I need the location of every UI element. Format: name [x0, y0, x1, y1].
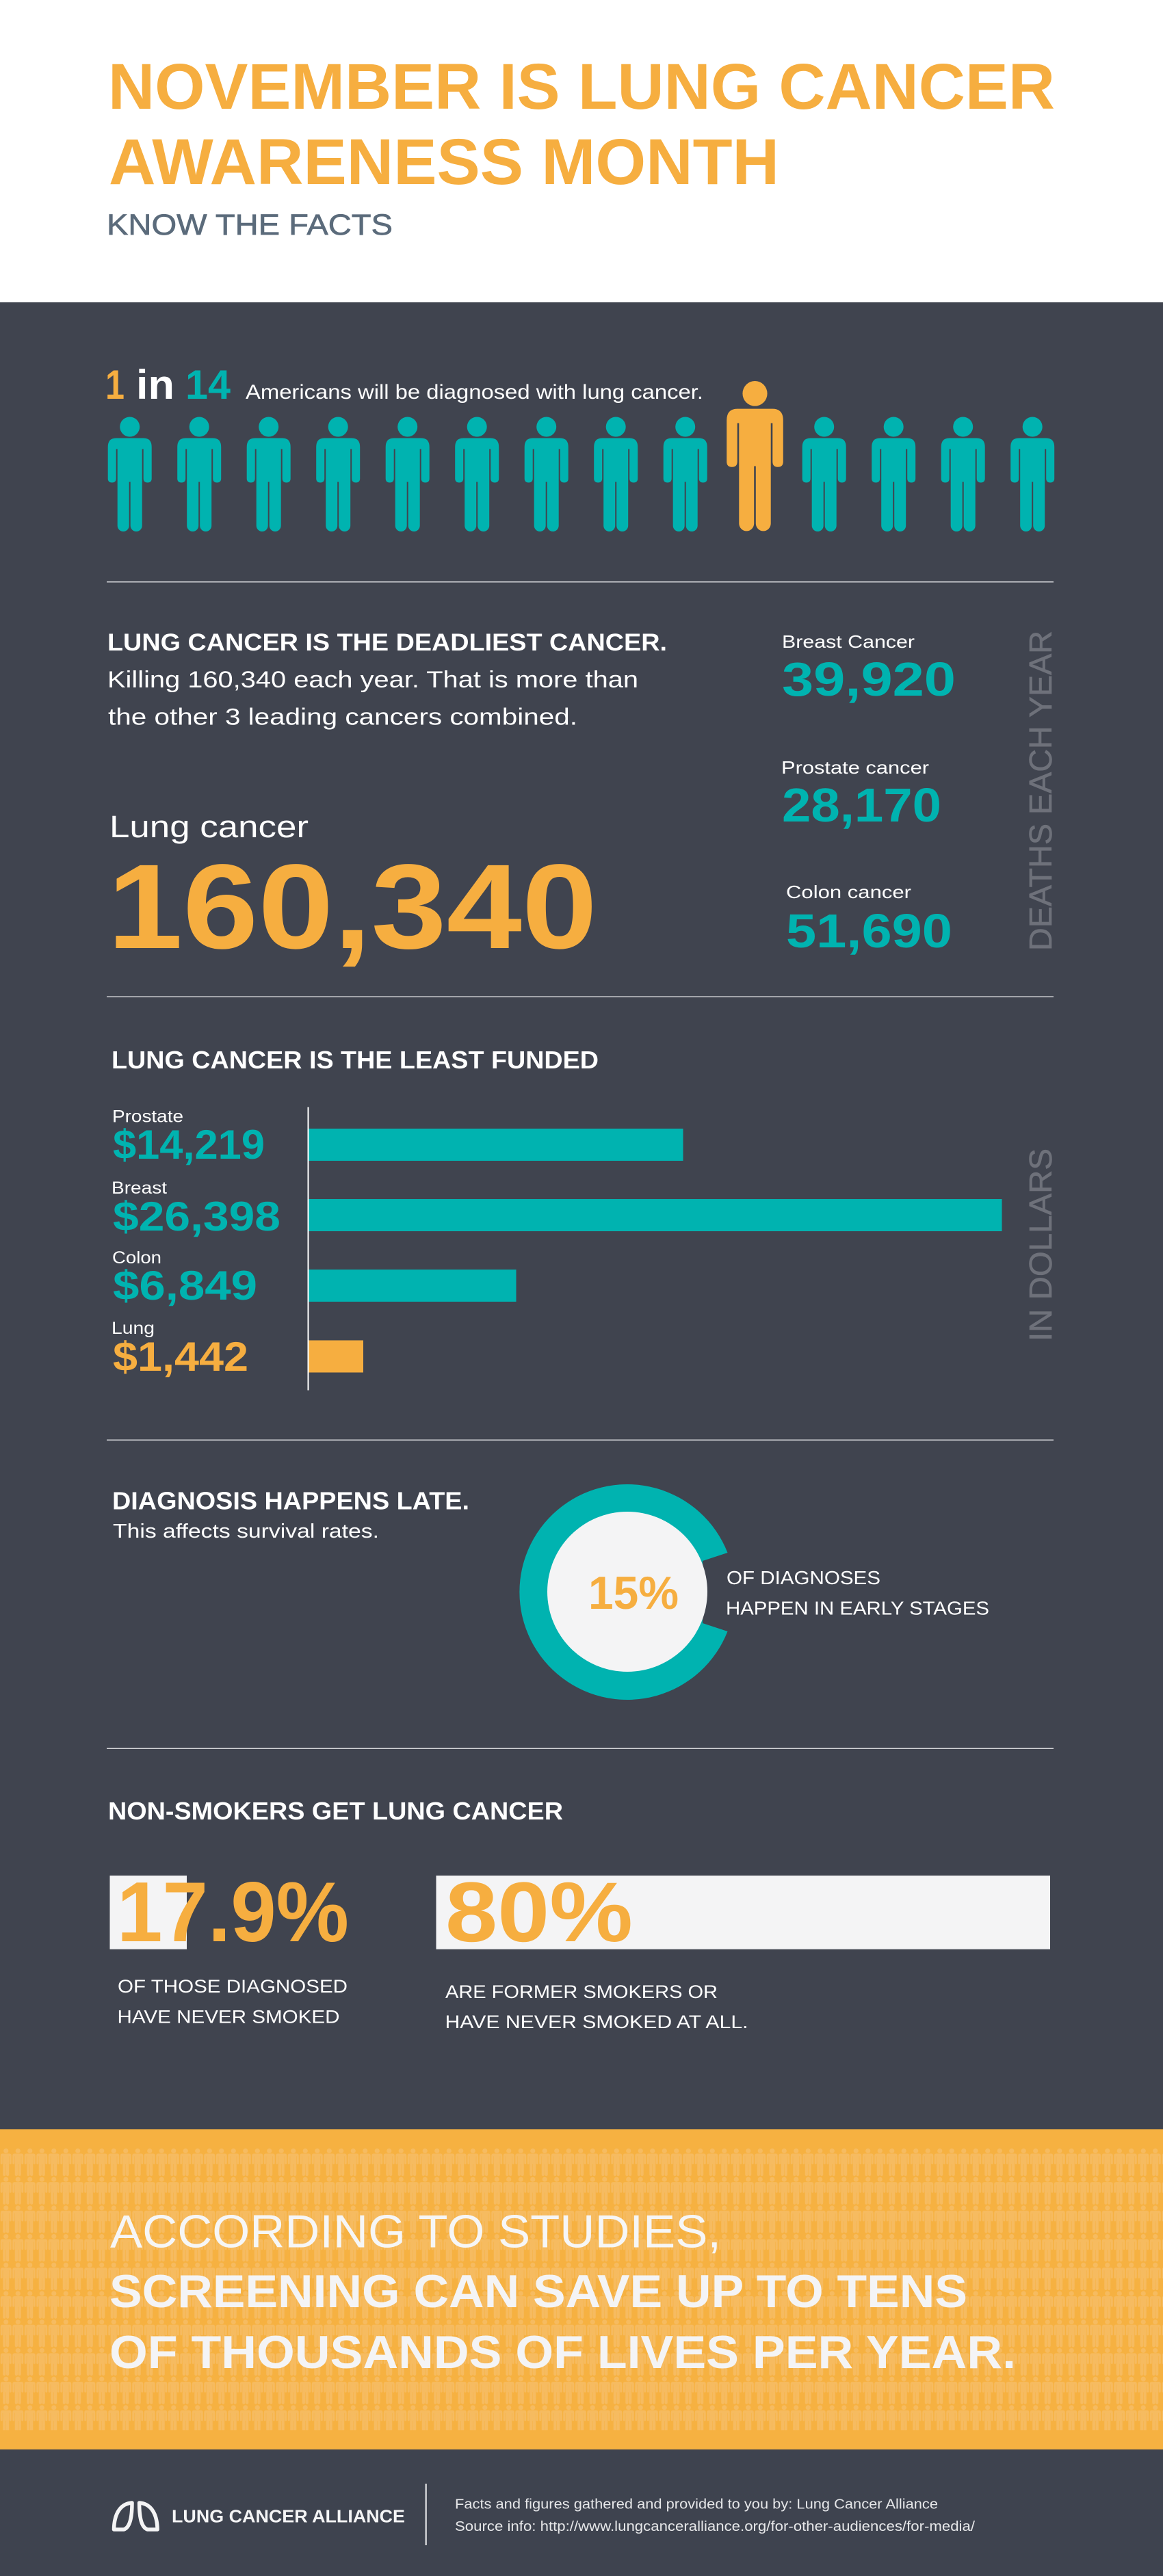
icon: lungs	[114, 2503, 157, 2529]
label: colon funding	[112, 1248, 257, 1309]
title: NOVEMBER IS LUNG CANCER	[108, 51, 1055, 123]
callout text: ACCORDING TO STUDIES,	[110, 2205, 721, 2257]
statistic: 1 in 14: 14	[185, 362, 231, 408]
caption: 17.9%: OF THOSE DIAGNOSED	[118, 1976, 348, 1997]
subheading: This affects survival rates.	[113, 1521, 379, 1542]
header background	[0, 0, 1163, 302]
section: late diagnosis	[112, 1484, 989, 1700]
heading: non-smokers: NON-SMOKERS GET LUNG CANCER	[108, 1797, 563, 1825]
label: colon funding: $6,849	[113, 1263, 257, 1309]
caption: 17.9%: HAVE NEVER SMOKED	[118, 2007, 339, 2027]
value: 17.9%: 17.9%	[117, 1865, 349, 1960]
bar: breast	[309, 1199, 1002, 1231]
statistic: 1 in 14: in	[136, 362, 174, 408]
dark main panel	[0, 302, 1163, 2129]
stat: prostate cancer deaths: 28,170	[782, 778, 941, 832]
section: least funded	[112, 1046, 1058, 1390]
stat: breast cancer deaths: 39,920	[782, 653, 956, 706]
bar: lung	[309, 1341, 363, 1372]
bar: prostate	[309, 1129, 683, 1161]
stat: breast cancer deaths	[782, 631, 956, 706]
callout text	[109, 2205, 1016, 2378]
heading: least funded: LUNG CANCER IS THE LEAST FUNDED	[112, 1046, 599, 1074]
callout text: SCREENING CAN SAVE UP TO TENS	[109, 2265, 967, 2317]
lung cancer label: Lung cancer	[109, 809, 309, 844]
caption: 80%: HAVE NEVER SMOKED AT ALL.	[445, 2012, 748, 2032]
side label: deaths each year: DEATHS EACH YEAR	[1023, 631, 1058, 951]
body text: the other 3 leading cancers combined.	[108, 705, 577, 731]
stat: breast cancer deaths: Breast Cancer	[782, 631, 915, 652]
pictogram: row of people	[108, 381, 1054, 531]
footer panel	[0, 2449, 1163, 2576]
band background	[0, 2129, 1163, 2449]
proportion bar: 17.9%	[109, 1876, 187, 1949]
donut caption: HAPPEN IN EARLY STAGES	[726, 1598, 989, 1618]
label: prostate funding: $14,219	[113, 1122, 265, 1168]
section: non-smokers	[108, 1797, 1050, 2032]
bar chart	[112, 1107, 1002, 1390]
label: lung funding: $1,442	[113, 1334, 248, 1380]
body text	[107, 667, 638, 731]
bar: colon	[309, 1270, 516, 1302]
body text: Killing 160,340 each year. That is more than	[107, 667, 638, 693]
stat: prostate cancer deaths: Prostate cancer	[781, 757, 929, 778]
icon: highlighted person	[727, 381, 783, 531]
donut caption: OF DIAGNOSES	[727, 1567, 880, 1588]
footer credits: Facts and figures gathered and provided to you by: Lung Cancer Alliance	[455, 2497, 938, 2512]
donut caption	[726, 1567, 989, 1618]
statistic: 1 in 14: 1	[105, 362, 125, 408]
label: lung funding	[112, 1319, 248, 1380]
label: breast funding: $26,398	[113, 1194, 280, 1239]
footer credits: Source info: http://www.lungcanceralliance.org/for-other-audiences/for-media/	[455, 2519, 975, 2534]
label: prostate funding: Prostate	[112, 1107, 183, 1126]
caption: 17.9%	[118, 1976, 348, 2027]
stat: colon cancer deaths: 51,690	[786, 904, 952, 958]
side label: in dollars: IN DOLLARS	[1023, 1148, 1058, 1341]
stat: prostate cancer deaths	[781, 757, 941, 832]
statistic caption: Americans will be diagnosed with lung cancer.	[246, 381, 703, 404]
heading: diagnosis happens late: DIAGNOSIS HAPPENS LATE.	[112, 1487, 469, 1514]
donut value: 15%	[588, 1567, 679, 1619]
value: 80%: 80%	[445, 1865, 633, 1960]
statistic: 1 in 14	[105, 362, 231, 408]
callout text: OF THOUSANDS OF LIVES PER YEAR.	[109, 2326, 1016, 2378]
organisation name: LUNG CANCER ALLIANCE	[172, 2506, 405, 2526]
stat: colon cancer deaths: Colon cancer	[786, 882, 911, 902]
section: 1 in 14	[105, 362, 1054, 531]
label: colon funding: Colon	[112, 1248, 161, 1267]
heading: deadliest cancer: LUNG CANCER IS THE DEADLIEST CANCER.	[107, 629, 667, 656]
callout band	[0, 2129, 1163, 2449]
footer logo	[114, 2503, 405, 2529]
label: breast funding: Breast	[112, 1179, 167, 1198]
section: deadliest cancer	[107, 629, 1058, 974]
axis	[308, 1107, 309, 1390]
title	[108, 51, 1055, 198]
subtitle: KNOW THE FACTS	[107, 209, 393, 241]
label: lung funding: Lung	[112, 1319, 155, 1338]
donut chart	[519, 1484, 728, 1700]
stat: colon cancer deaths	[786, 882, 952, 958]
donut ring	[519, 1484, 728, 1700]
lung cancer number: 160,340	[107, 840, 597, 974]
footer credits	[455, 2497, 975, 2534]
proportion bar: 80%	[436, 1876, 1050, 1949]
caption: 80%: ARE FORMER SMOKERS OR	[445, 1982, 718, 2002]
donut centre	[547, 1512, 707, 1672]
caption: 80%	[445, 1982, 748, 2032]
title: AWARENESS MONTH	[109, 126, 779, 198]
label: breast funding	[112, 1179, 280, 1239]
